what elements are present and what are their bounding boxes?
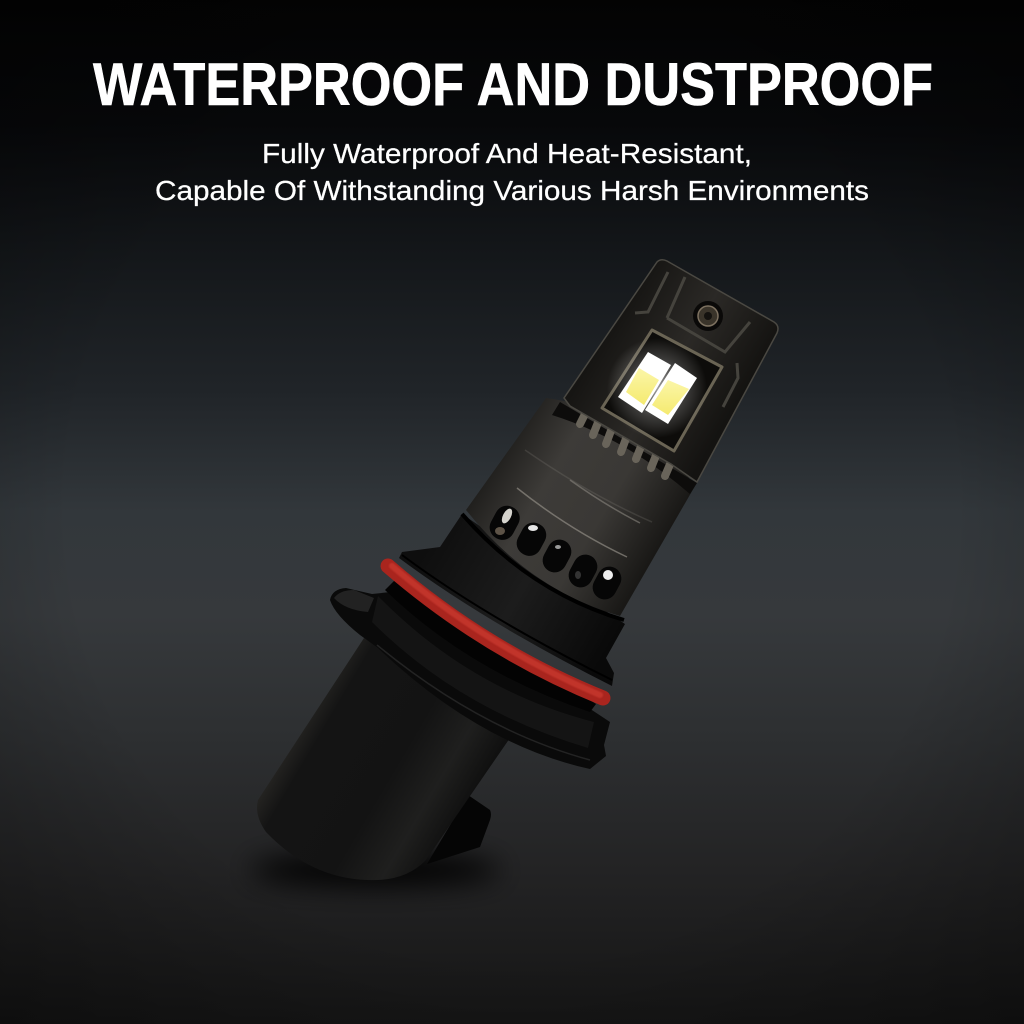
cylinder base xyxy=(257,638,512,880)
red o-ring seal xyxy=(388,566,603,698)
cooling fins xyxy=(580,412,671,476)
screw xyxy=(693,301,723,331)
locating tab xyxy=(427,795,491,864)
headlight bulb xyxy=(257,260,778,880)
LED chip left xyxy=(618,352,671,413)
head panel ridges xyxy=(635,272,750,407)
subtitle: Capable Of Withstanding Various Harsh Environments xyxy=(155,175,869,206)
black flange ring xyxy=(372,596,594,748)
LED window xyxy=(602,330,722,451)
subtitle: Fully Waterproof And Heat-Resistant, xyxy=(262,138,752,169)
black collar xyxy=(399,514,625,686)
chip mount head xyxy=(564,260,778,482)
ground shadow xyxy=(250,854,500,886)
vent holes xyxy=(485,501,626,604)
LED chip right xyxy=(645,363,697,424)
fin band shadow xyxy=(552,402,697,494)
flange plate xyxy=(330,588,610,769)
subtitle xyxy=(155,138,869,206)
LED glow xyxy=(607,338,707,438)
heat sink body xyxy=(466,398,695,616)
machined highlights xyxy=(517,450,652,557)
